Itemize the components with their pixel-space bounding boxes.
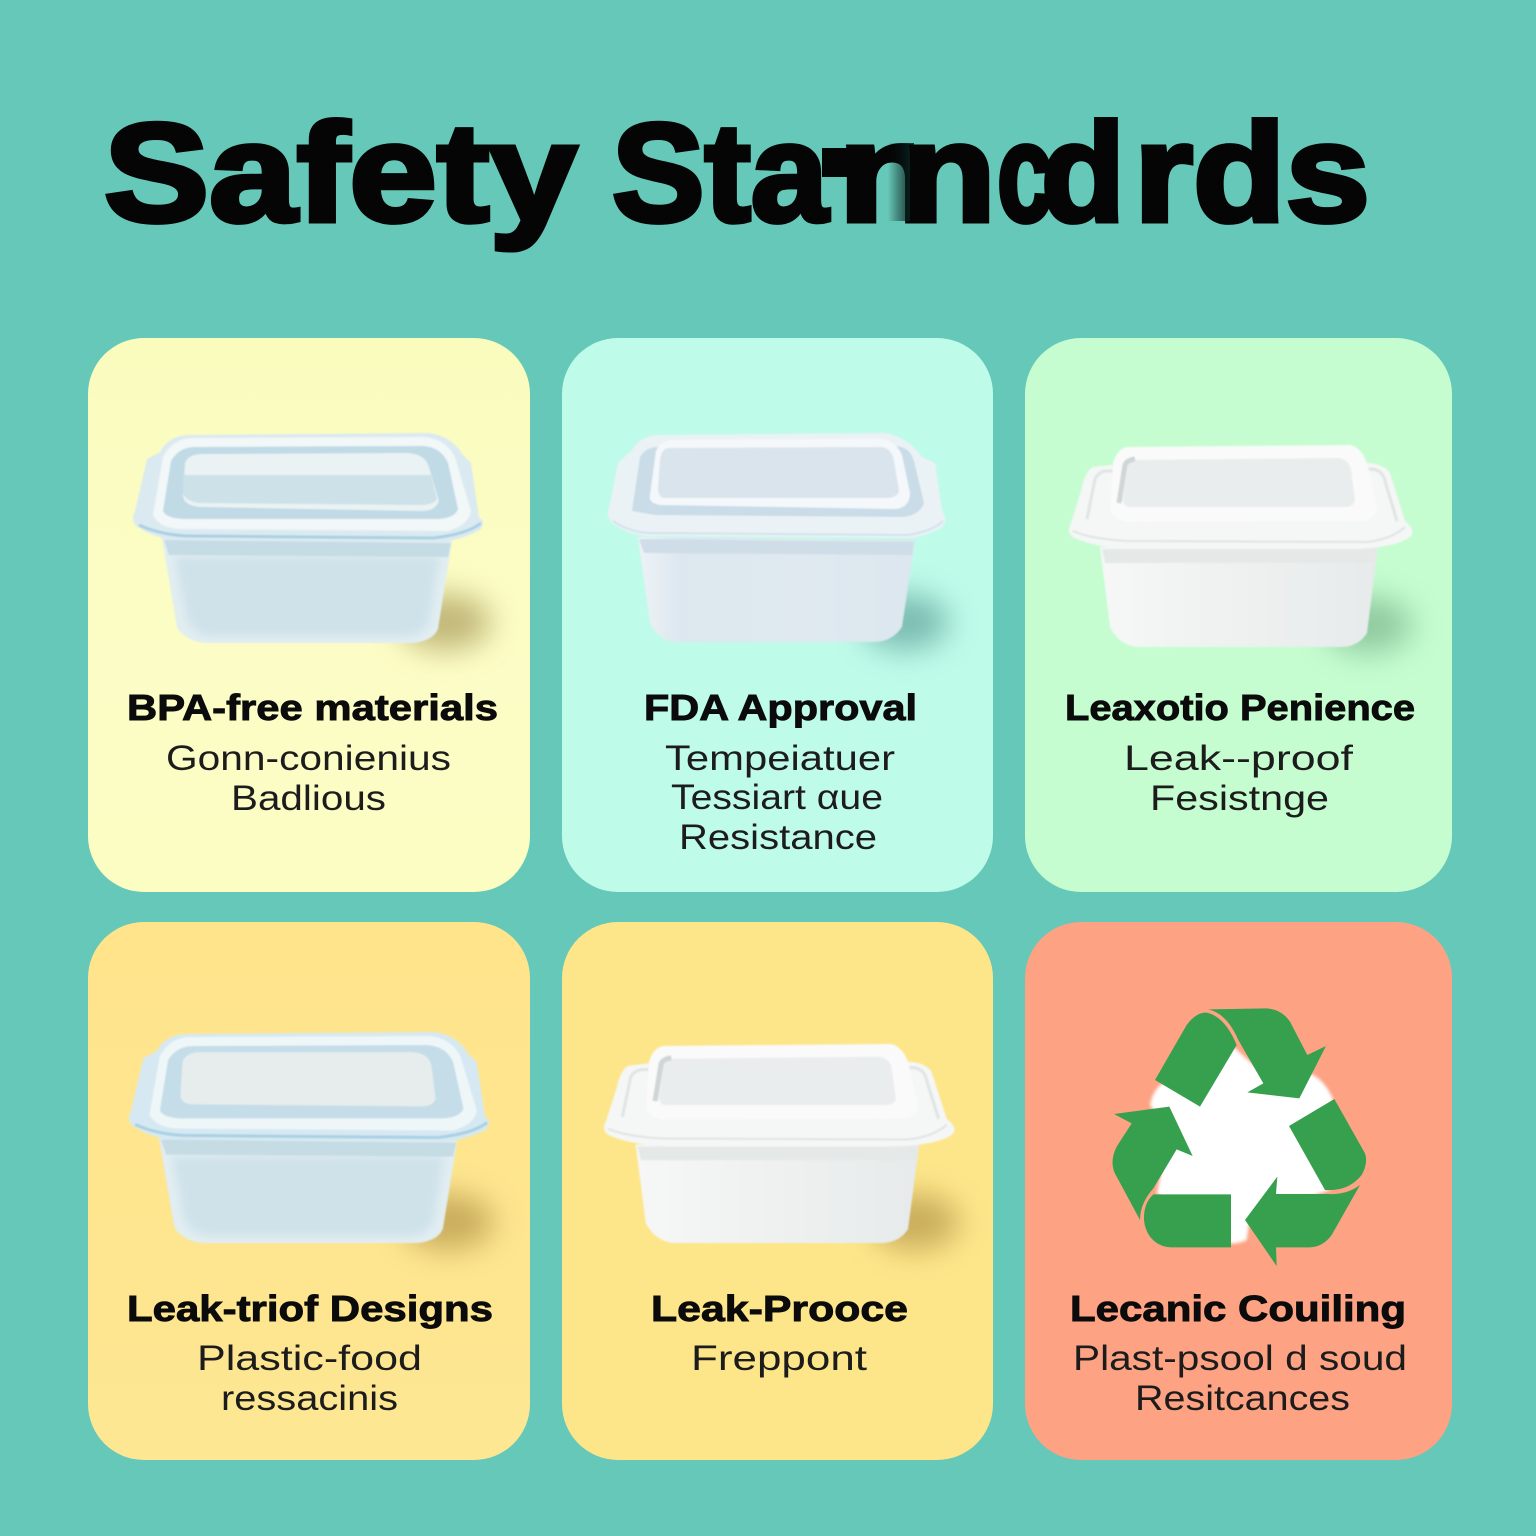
panel: Lecanic Couiling — [1025, 922, 1452, 1460]
title: Safety — [104, 94, 577, 251]
heading: Leak-Prooce: Leak-Prooce — [651, 1288, 908, 1329]
text: description: ressacinis — [221, 1379, 398, 1418]
title: n — [838, 94, 942, 251]
icon: clear container — [129, 1032, 494, 1250]
text: description: Resitcances — [1135, 1379, 1350, 1418]
panel: Leaxotio Penience — [1025, 338, 1452, 892]
text: description: Fesistnge — [1150, 779, 1329, 818]
text: description: Plast-psool d soud — [1073, 1339, 1407, 1378]
text: description: Leak--proof — [1124, 739, 1353, 778]
panel: Leak-Prooce — [562, 922, 993, 1460]
panel: BPA-free materials — [88, 338, 530, 892]
icon: white container — [604, 1044, 959, 1250]
heading: FDA Approval: FDA Approval — [644, 687, 917, 728]
heading: BPA-free materials: BPA-free materials — [127, 687, 498, 728]
title: c — [997, 94, 1053, 251]
title — [104, 94, 1370, 251]
panel: Leak-triof Designs — [88, 922, 530, 1460]
title: rds — [1134, 94, 1370, 251]
icon: clear container — [133, 433, 491, 650]
text: description: Freppont — [691, 1339, 867, 1378]
text: description: Resistance — [679, 818, 877, 857]
panel: FDA Approval — [562, 338, 993, 892]
title: d — [1041, 94, 1125, 251]
heading: Lecanic Couiling: Lecanic Couiling — [1070, 1288, 1406, 1329]
icon: frosted container — [608, 433, 949, 650]
title: n — [902, 94, 996, 251]
text: description: Badlious — [231, 779, 386, 818]
heading: Leak-triof Designs: Leak-triof Designs — [127, 1288, 493, 1329]
heading: Leaxotio Penience: Leaxotio Penience — [1065, 687, 1415, 728]
text: description: Gonn-conienius — [166, 739, 451, 778]
icon: white container — [1069, 445, 1413, 653]
text: description: Tempeiatuer — [665, 739, 895, 778]
text: description: Tessiart αue — [671, 778, 883, 817]
icon: recycling symbol — [1112, 1008, 1366, 1266]
title: Sta — [612, 94, 829, 251]
text: description: Plastic-food — [197, 1339, 422, 1378]
